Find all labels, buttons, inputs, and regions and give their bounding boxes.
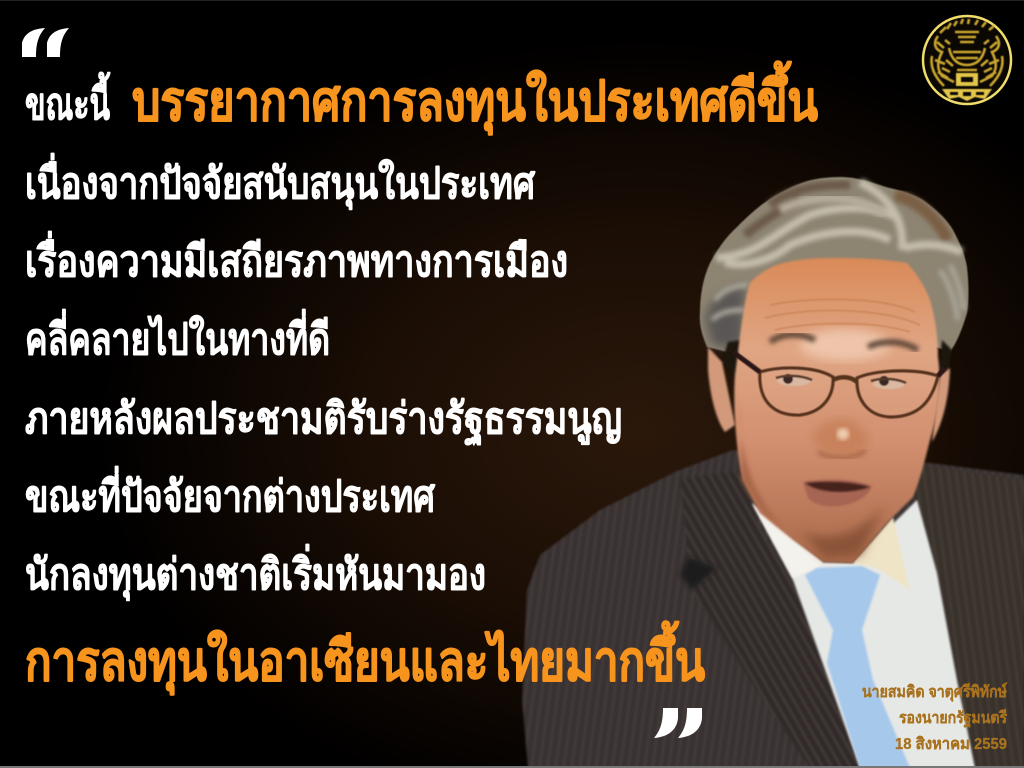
- central vessel: [949, 32, 985, 70]
- face: [733, 258, 945, 563]
- opening quotation mark: [22, 28, 69, 57]
- portrait photo: [522, 177, 1024, 768]
- closing highlight: การลงทุนในอาเซียนและไทยมากขึ้น: [25, 621, 705, 696]
- bottom edge strip: [0, 766, 1024, 768]
- shirt: [752, 500, 975, 768]
- glasses: [733, 352, 945, 417]
- mouth: [803, 479, 872, 507]
- line 4: คลี่คลายไปในทางที่ดี: [25, 309, 330, 364]
- speaker name: นายสมคิด จาตุศรีพิทักษ์: [862, 682, 1007, 702]
- line 1: ขณะนี้: [25, 71, 111, 129]
- line 7: นักลงทุนต่างชาติเริ่มหันมามอง: [25, 544, 486, 602]
- hair: [700, 177, 968, 385]
- line 5: ภายหลังผลประชามติรับร่างรัฐธรรมนูญ: [25, 395, 622, 446]
- line 3: เรื่องความมีเสถียรภาพทางการเมือง: [25, 231, 568, 286]
- quote text: [25, 61, 818, 696]
- jacket: [522, 450, 1024, 768]
- date: 18 สิงหาคม 2559: [895, 735, 1007, 753]
- eyes: [776, 374, 906, 389]
- speaker title: รองนายกรัฐมนตรี: [899, 708, 1007, 728]
- ears: [708, 347, 950, 442]
- top crown rays: [940, 19, 994, 33]
- top edge strip: [0, 0, 1024, 1]
- pedestal: [942, 73, 992, 101]
- line 6: ขณะที่ปัจจัยจากต่างประเทศ: [25, 466, 436, 521]
- right lion: [980, 36, 1002, 86]
- line 2: เนื่องจากปัจจัยสนับสนุนในประเทศ: [25, 153, 536, 211]
- attribution: [862, 682, 1007, 753]
- left lion: [932, 36, 954, 86]
- shirt collar: [752, 503, 910, 590]
- tie: [805, 566, 910, 768]
- government seal: [923, 16, 1011, 104]
- eyebrows: [770, 335, 918, 350]
- closing quotation mark: [654, 708, 702, 738]
- nose: [812, 419, 868, 456]
- headline highlight: บรรยากาศการลงทุนในประเทศดีขึ้น: [132, 61, 818, 136]
